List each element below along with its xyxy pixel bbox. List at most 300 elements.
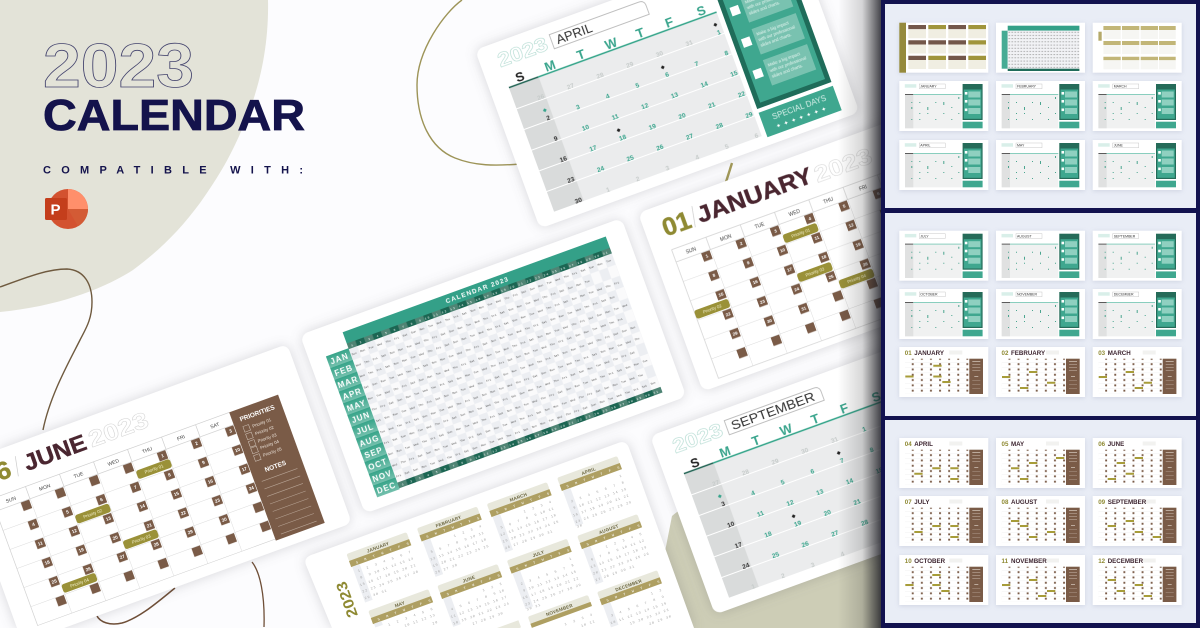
panel: April to December planner slides xyxy=(885,420,1196,623)
date numbers: 13 xyxy=(816,488,825,497)
thumbnail: February planner: FEBRUARY xyxy=(1011,350,1046,357)
date numbers: 26 xyxy=(862,261,869,267)
month: April: S M T W T F S xyxy=(563,466,621,490)
date numbers: 18 xyxy=(618,134,628,143)
month column xyxy=(326,348,400,497)
priority pills: Priority 02 xyxy=(702,303,723,315)
day rows: Sat Sun Mon Tue Wed Thu Fri Sat Sun Mon Tue Wed Thu Fri Sat Sun Mon Tue Wed Thu Fri Sat Sun Mon Tue Wed Thu Fri Sat Sun Mon xyxy=(375,325,636,423)
month column: JUN xyxy=(350,410,371,425)
date numbers: 21 xyxy=(707,101,717,111)
thumbnail: September planner xyxy=(1093,496,1182,546)
date numbers: 10 xyxy=(779,247,786,254)
thumbnail: February planner xyxy=(996,347,1085,397)
date numbers: 31 xyxy=(800,305,807,312)
date numbers: 21 xyxy=(146,522,153,529)
card: 12-month mini calendar xyxy=(305,442,694,628)
month: August: S M T W T F S xyxy=(584,524,641,549)
month: July xyxy=(507,539,586,613)
year outline: 2023 xyxy=(670,420,726,458)
date numbers: 6 xyxy=(810,468,816,476)
date numbers xyxy=(536,29,762,206)
date numbers: 12 xyxy=(786,499,795,508)
weekday header: FRI xyxy=(176,434,186,443)
date numbers: 28 xyxy=(931,236,937,242)
thumbnail: September teal xyxy=(1093,231,1182,281)
date numbers: 6 xyxy=(99,497,104,502)
thumbnail: April teal: APRIL xyxy=(920,144,930,148)
weekday header: THU xyxy=(141,446,154,455)
priorities panel xyxy=(229,395,325,541)
date numbers: 29 xyxy=(771,458,780,467)
weekday header: T xyxy=(575,46,587,63)
thumbnail: July teal: JULY xyxy=(920,234,929,238)
month: August: AUGUST xyxy=(598,523,619,535)
date grid xyxy=(684,399,937,599)
month: May: S M T W T F S xyxy=(375,599,432,624)
month name: SEPTEMBER xyxy=(729,389,817,433)
month column: MAR xyxy=(337,375,360,390)
month column: APR xyxy=(342,387,363,402)
date numbers: 31 xyxy=(830,436,840,445)
thumbnail: November planner xyxy=(996,555,1085,605)
date numbers: 28 xyxy=(860,519,870,528)
date numbers: 2 xyxy=(546,115,552,123)
priorities list xyxy=(243,417,283,461)
date numbers: 28 xyxy=(741,469,751,478)
thumbnail: May planner: MAY xyxy=(1011,441,1025,448)
thumbnail: yearly gold xyxy=(1093,23,1182,73)
thumbnail: May planner xyxy=(996,438,1085,488)
thumbnail: March teal: MARCH xyxy=(1114,85,1127,89)
thumbnail: March planner: MARCH xyxy=(1108,350,1131,357)
date numbers: 18 xyxy=(764,531,773,540)
date numbers: 15 xyxy=(875,467,884,476)
checklist: Make a big impact xyxy=(767,51,801,68)
month: January: 15 16 17 18 19 20 21 xyxy=(360,564,417,588)
weekday header: MON xyxy=(38,483,52,493)
thumbnail: October teal: OCTOBER xyxy=(920,293,938,297)
weekday header: W xyxy=(778,420,795,439)
month: April: 9 10 11 12 13 14 15 xyxy=(570,488,628,512)
date numbers: 10 xyxy=(234,447,241,453)
weekday header: S xyxy=(695,2,708,19)
panel: overview and January to June slides xyxy=(885,4,1196,208)
date numbers: 1 xyxy=(751,583,757,591)
month: June: 1 2 3 xyxy=(446,582,503,607)
date numbers: 31 xyxy=(685,39,694,49)
month: December xyxy=(597,570,670,628)
thumbnail: December planner: DECEMBER xyxy=(1108,558,1144,565)
date numbers: 25 xyxy=(771,551,781,560)
background blob: beige top-left xyxy=(0,0,268,312)
month: November: NOVEMBER xyxy=(545,603,574,617)
December date row 5: 28 29 30 xyxy=(649,615,673,627)
month: April: 30 xyxy=(577,524,584,530)
month: December: DECEMBER xyxy=(615,578,643,592)
month: August: 20 21 22 23 24 25 26 xyxy=(593,552,650,577)
date numbers: 22 xyxy=(725,311,732,317)
right-edge shadow xyxy=(838,0,882,628)
priorities list: Priority 04 xyxy=(259,439,280,450)
date numbers: 2 xyxy=(635,176,641,184)
weekday header: MON xyxy=(719,233,733,243)
header rule xyxy=(509,77,538,88)
date numbers: 20 xyxy=(678,112,687,121)
date numbers: 3 xyxy=(665,165,671,173)
thumbnail: yearly brown and olive xyxy=(899,23,988,73)
month: June: S M T W T F S xyxy=(444,574,501,598)
month: March: 1 2 3 4 xyxy=(495,501,553,525)
date numbers: 26 xyxy=(801,540,810,550)
special days stars: ✦✦✦✦✦✦✦ xyxy=(775,105,830,130)
date numbers: 30 xyxy=(800,447,810,456)
thumbnail: November teal xyxy=(996,289,1085,339)
date numbers: 25 xyxy=(828,273,835,280)
date numbers: 8 xyxy=(712,272,716,278)
date numbers: 13 xyxy=(670,91,680,101)
date numbers: 26 xyxy=(656,144,665,153)
date numbers: 5 xyxy=(780,479,786,487)
month: July: JULY xyxy=(532,549,545,558)
thumbnail: January teal xyxy=(899,81,988,131)
side panel inner xyxy=(707,0,825,103)
weekday header: F xyxy=(838,400,851,417)
priority pills: Priority 03 xyxy=(131,533,152,545)
month: August xyxy=(577,514,655,585)
panel: July to December and January to March slides xyxy=(885,213,1196,416)
priorities list: Priority 05 xyxy=(262,446,283,458)
month: May: MAY xyxy=(394,600,406,608)
month: May xyxy=(368,589,435,628)
month box xyxy=(549,0,649,49)
date numbers: 24 xyxy=(248,485,255,492)
month: April: 1 xyxy=(565,474,623,499)
month: June: JUNE xyxy=(462,575,476,584)
date numbers: 8 xyxy=(869,447,875,455)
date numbers: 22 xyxy=(180,510,187,516)
thumbnail: October planner: OCTOBER xyxy=(914,558,946,565)
month: April: 2 3 4 5 6 7 8 xyxy=(568,481,626,505)
side panel frame xyxy=(702,0,831,109)
priorities heading: PRIORITIES xyxy=(239,404,277,423)
thumbnail: January planner: 01 xyxy=(905,350,912,357)
month: December: 3 4 5 6 7 8 9 xyxy=(608,595,666,620)
checklist: Make a big impact xyxy=(756,20,790,37)
date numbers: 1 xyxy=(862,426,868,434)
thumbnail: July planner: 07 xyxy=(905,499,912,506)
thumbnail: November teal: NOVEMBER xyxy=(1017,293,1038,297)
bottom day numbers: 1 2 3 4 5 6 7 8 9 10 11 12 13 14 15 16 17 18 19 20 21 22 23 24 25 26 27 28 29 30 31 xyxy=(399,390,660,487)
weekday header: S xyxy=(513,68,527,85)
December date row 4: 19 20 21 22 23 xyxy=(630,608,670,627)
priority pills xyxy=(33,459,200,593)
title: CALENDAR: CALENDAR xyxy=(43,91,305,140)
year outline: 2023 xyxy=(810,143,876,187)
date numbers: 3 xyxy=(721,501,727,509)
header rule xyxy=(684,463,713,474)
month: March: 5 6 7 8 9 10 11 xyxy=(498,507,555,531)
day rows: Sun Mon Tue Wed Thu Fri Sat Sun Mon Tue Wed Thu Fri Sat Sun Mon Tue Wed Thu Fri Sat Sun Mon Tue Wed Thu Fri Sat Sun Mon Tue xyxy=(388,358,648,456)
date numbers: 7 xyxy=(694,61,700,69)
day rows: Sun Mon Tue Wed Thu Fri Sat Sun Mon Tue Wed Thu Fri Sat Sun Mon Tue Wed Thu Fri Sat Sun Mon Tue Wed Thu Fri Sat Sun Mon Tue xyxy=(351,258,612,356)
date numbers: 9 xyxy=(899,436,905,444)
thumbnail: April planner: APRIL xyxy=(914,441,933,448)
thumbnail: August teal xyxy=(996,231,1085,281)
thumbnail: December teal: DECEMBER xyxy=(1114,293,1134,297)
event dots xyxy=(776,450,856,519)
date numbers: 11 xyxy=(756,510,766,519)
date numbers: 14 xyxy=(916,197,923,204)
notes heading: NOTES xyxy=(264,459,288,474)
priority pills: Priority 04 xyxy=(847,273,867,284)
checklist: slides and charts. xyxy=(760,32,792,48)
month: March: S M T W T F S xyxy=(493,492,551,517)
date numbers: 4 xyxy=(750,490,756,498)
month column: NOV xyxy=(371,469,393,484)
month: March: 12 13 14 15 16 17 18 xyxy=(500,514,558,538)
date numbers: 19 xyxy=(855,241,862,248)
weekday header: T xyxy=(634,25,646,41)
date numbers: 27 xyxy=(831,530,840,539)
weekday header: FRI xyxy=(858,184,868,193)
top day numbers: 1 2 3 4 5 6 7 8 9 10 11 12 13 14 15 16 17 18 19 20 21 22 23 24 25 26 27 28 29 30 31 xyxy=(348,251,609,348)
date numbers: 2 xyxy=(780,573,787,580)
date numbers: 14 xyxy=(845,477,855,487)
month column: FEB xyxy=(333,363,354,378)
date numbers: 4 xyxy=(808,216,812,221)
thumbnail: December teal xyxy=(1093,289,1182,339)
month: February: 26 27 28 xyxy=(435,564,459,576)
date numbers: 16 xyxy=(752,279,759,285)
date numbers: 2 xyxy=(739,241,744,246)
date numbers: 30 xyxy=(920,497,929,506)
November date row 1: 1 2 3 4 xyxy=(562,613,594,628)
date numbers: 30 xyxy=(655,50,665,59)
date numbers: 20 xyxy=(112,534,119,541)
month: July: 2 3 4 5 6 7 8 xyxy=(518,564,575,588)
month box xyxy=(724,386,824,435)
date numbers: 3 xyxy=(773,228,778,234)
priority pills: Priority 03 xyxy=(805,266,826,278)
month: January: 22 23 24 25 26 27 28 xyxy=(362,570,420,595)
month: August: 6 7 8 9 10 11 12 xyxy=(588,539,646,563)
month: November xyxy=(528,595,592,628)
date numbers: 9 xyxy=(746,260,751,266)
date numbers: 3 xyxy=(575,104,581,112)
weekday header: TUE xyxy=(73,471,85,480)
weekday header: SAT xyxy=(892,172,902,181)
thumbnail: May teal: MAY xyxy=(1017,144,1025,148)
May date row 3: 20 xyxy=(432,621,439,627)
month title: JANUARY xyxy=(693,162,816,228)
thumbnail: May planner: 05 xyxy=(1002,441,1009,448)
month: January: 8 9 10 11 12 13 14 xyxy=(357,557,415,582)
date numbers: 21 xyxy=(853,498,862,507)
day rows: Wed Thu Fri Sat Sun Mon Tue Wed Thu Fri Sat Sun Mon Tue Wed Thu Fri Sat Sun Mon Tue Wed Thu Fri Sat Sun Mon Tue xyxy=(355,279,590,367)
bottom day strip xyxy=(397,387,663,488)
month: January xyxy=(346,532,424,603)
date grid xyxy=(509,13,762,213)
thumbnail: June teal xyxy=(1093,140,1182,190)
month: January: S M T W T F S xyxy=(353,542,411,567)
month: March: 19 20 21 22 23 24 25 xyxy=(502,520,560,545)
weekday header: M xyxy=(542,57,558,75)
date numbers: 17 xyxy=(589,145,598,154)
date numbers: 11 xyxy=(814,235,820,241)
date numbers: 14 xyxy=(700,81,709,90)
priority pills: Priority 01 xyxy=(791,227,811,239)
date numbers: 21 xyxy=(923,216,930,223)
checklist xyxy=(727,0,816,90)
date numbers: 15 xyxy=(730,70,739,79)
divider slash xyxy=(688,206,699,227)
date numbers: 22 xyxy=(882,487,892,497)
month: August: 1 2 3 4 5 xyxy=(586,533,643,557)
weekday header: SUN xyxy=(5,496,17,505)
date numbers: 1 xyxy=(705,253,709,259)
event dot teal xyxy=(542,108,547,113)
month index: 01 xyxy=(658,206,695,243)
weekday header: M xyxy=(717,443,733,461)
date numbers: 15 xyxy=(173,491,180,497)
month: February: FEBRUARY xyxy=(435,515,462,529)
year outline: 2023 xyxy=(85,407,152,452)
date numbers xyxy=(711,415,937,592)
thumbnail: July teal xyxy=(899,231,988,281)
date numbers: 11 xyxy=(611,113,620,122)
month: March: 26 27 28 29 30 31 xyxy=(505,530,554,551)
date numbers: 24 xyxy=(596,165,606,174)
date numbers: 1 xyxy=(605,187,612,194)
icon: PowerPoint: P xyxy=(50,202,61,218)
thumbnail: September planner: 09 xyxy=(1098,499,1106,506)
thumbnail: May teal xyxy=(996,140,1085,190)
date numbers: 3 xyxy=(228,428,233,434)
month: July: 9 10 11 12 13 14 15 xyxy=(520,570,578,595)
weekday header: SUN xyxy=(685,246,698,256)
thumbnail: March teal xyxy=(1093,81,1182,131)
date numbers: 29 xyxy=(187,529,194,535)
weekday header: WED xyxy=(788,209,801,218)
weekday header: S xyxy=(870,388,883,405)
thumbnail: August planner: AUGUST xyxy=(1011,499,1037,506)
thumbnail: January planner: JANUARY xyxy=(914,350,945,357)
June planner content xyxy=(0,361,325,628)
date numbers: 27 xyxy=(685,133,695,142)
month title: JUNE xyxy=(20,429,90,476)
date numbers: 28 xyxy=(596,72,605,81)
thumbnail: March planner xyxy=(1093,347,1182,397)
day rows: Wed Thu Fri Sat Sun Mon Tue Wed Thu Fri Sat Sun Mon Tue Wed Thu Fri Sat Sun Mon Tue Wed Thu Fri Sat Sun Mon Tue Wed Thu xyxy=(392,372,644,468)
month: October header sliver xyxy=(497,620,521,628)
date numbers: 17 xyxy=(734,541,744,551)
event dot teal xyxy=(717,494,722,499)
teal header bar xyxy=(343,236,610,344)
header rule teal xyxy=(538,12,717,77)
date numbers: 7 xyxy=(839,457,846,465)
date numbers: 12 xyxy=(641,102,650,111)
thumbnail: January teal: JANUARY xyxy=(920,85,937,89)
month: April: 23 24 25 26 27 28 29 xyxy=(575,501,633,525)
special days label: SPECIAL DAYS xyxy=(771,94,828,122)
date numbers: 9 xyxy=(201,460,206,465)
date numbers: 4 xyxy=(695,154,701,162)
weekday header: T xyxy=(750,432,762,449)
day rows: Tue Wed Thu Fri Sat Sun Mon Tue Wed Thu Fri Sat Sun Mon Tue Wed Thu Fri Sat Sun Mon Tue Wed Thu Fri Sat Sun Mon Tue Wed Thu xyxy=(379,336,640,434)
month: January: 1 2 3 4 5 6 7 xyxy=(355,551,413,575)
month name: APRIL xyxy=(554,20,594,47)
day rows: Mon Tue Wed Thu Fri Sat Sun Mon Tue Wed Thu Fri Sat Sun Mon Tue Wed Thu Fri Sat Sun Mon Tue Wed Thu Fri Sat Sun Mon Tue Wed xyxy=(367,303,628,401)
date numbers: 23 xyxy=(214,497,221,504)
frame: navy background xyxy=(881,0,1200,628)
date numbers: 4 xyxy=(605,93,611,101)
date numbers: 13 xyxy=(882,210,889,216)
thumbnail: December planner xyxy=(1093,555,1182,605)
thumbnail: February teal xyxy=(996,81,1085,131)
weekday header: F xyxy=(663,14,676,31)
date numbers: 2 xyxy=(194,440,199,446)
month: June xyxy=(437,564,512,627)
date numbers: 5 xyxy=(842,203,847,209)
month column: OCT xyxy=(367,457,389,472)
date numbers: 30 xyxy=(766,318,773,324)
date numbers: 27 xyxy=(119,554,126,560)
date numbers: 25 xyxy=(51,578,58,585)
string: brown curve bottom xyxy=(97,588,175,624)
day rows: Fri Sat Sun Mon Tue Wed Thu Fri Sat Sun Mon Tue Wed Thu Fri Sat Sun Mon Tue Wed Thu Fri Sat Sun Mon Tue Wed Thu Fri Sat xyxy=(383,350,636,445)
month: April: APRIL xyxy=(581,466,596,476)
special days box xyxy=(759,86,842,137)
month: June: 4 5 6 7 8 9 10 xyxy=(448,589,506,613)
date numbers: 11 xyxy=(37,540,44,547)
date numbers: 26 xyxy=(536,93,546,103)
month: March xyxy=(487,482,565,553)
day rows xyxy=(351,258,656,479)
priority pills: Priority 02 xyxy=(82,508,103,519)
date numbers: 8 xyxy=(167,472,172,478)
checklist: slides and charts. xyxy=(771,63,803,79)
thumbnail: November planner: NOVEMBER xyxy=(1011,558,1047,565)
thumbnail: November planner: 11 xyxy=(1002,558,1009,565)
month: June: 11 12 13 14 15 16 17 xyxy=(450,596,508,620)
month column: MAY xyxy=(346,398,368,414)
month column: SEP xyxy=(363,445,384,460)
header title: CALENDAR 2023 xyxy=(445,276,510,305)
month: July: S M T W T F S xyxy=(513,549,571,573)
priority pills: Priority 01 xyxy=(144,463,165,475)
date numbers: 7 xyxy=(133,484,138,490)
divider slash xyxy=(12,456,22,476)
month: February: S M T W T F S xyxy=(423,517,481,541)
priorities list: Priority 01 xyxy=(251,417,272,429)
month column: AUG xyxy=(358,433,381,449)
date grid with squares xyxy=(676,174,959,378)
date numbers: 29 xyxy=(745,111,754,120)
month: July: 23 24 25 26 27 28 29 xyxy=(525,583,583,608)
month: August: 27 28 29 30 31 xyxy=(595,565,636,583)
weekday header: S xyxy=(688,454,702,471)
thumbnail: June planner: JUNE xyxy=(1108,441,1124,448)
thumbnail: September planner: SEPTEMBER xyxy=(1108,499,1147,506)
month: December: 10 11 12 13 14 15 16 xyxy=(610,602,668,626)
title: 2023 outline: 2023 xyxy=(43,32,194,101)
month: March: MARCH xyxy=(509,492,528,503)
thumbnail: August planner xyxy=(996,496,1085,546)
date numbers: 24 xyxy=(742,562,751,571)
date numbers: 28 xyxy=(153,541,160,548)
priority pills xyxy=(680,210,875,339)
date numbers: 26 xyxy=(85,566,92,572)
